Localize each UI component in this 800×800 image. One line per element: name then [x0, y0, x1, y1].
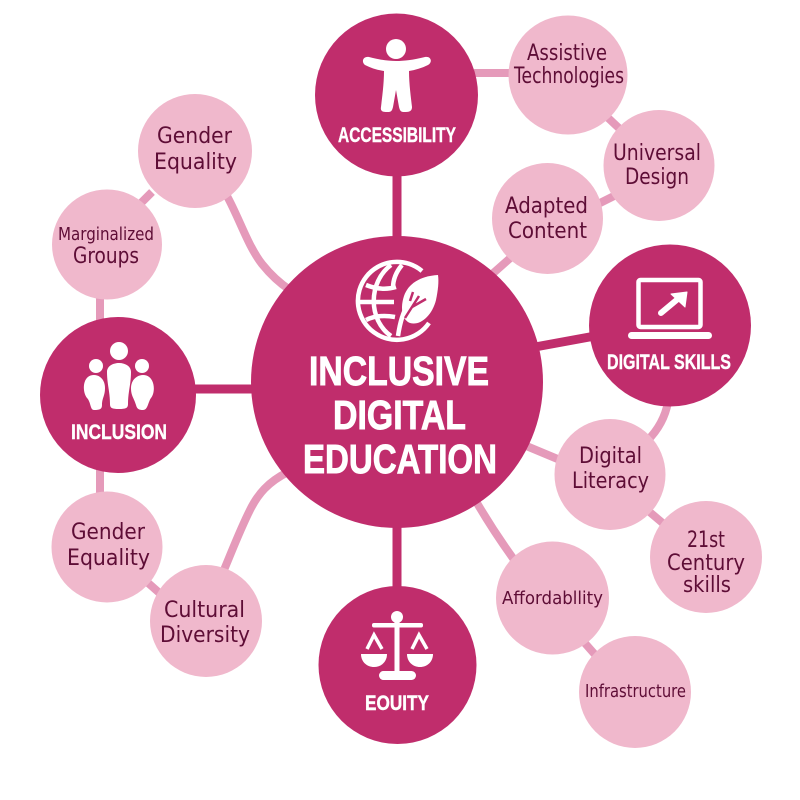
node: Digital Literacy: [554, 419, 666, 530]
node: Affordability: [496, 542, 609, 654]
node: Gender Equality (upper): [138, 94, 252, 208]
hub: Accessibility: [315, 14, 478, 176]
node: 21st Century skills: 21st: [687, 528, 725, 553]
node: Assistive Technologies: Technologies: [513, 64, 624, 89]
label: INCLUSION: [71, 421, 167, 444]
node: Universal Design: Design: [625, 165, 689, 190]
node: Assistive Technologies: [508, 16, 628, 134]
icon: globe with leaf: [358, 262, 438, 340]
node: Marginalized Groups: Groups: [73, 244, 139, 269]
hub: Inclusion: [40, 317, 196, 473]
label: ACCESSIBILITY: [338, 124, 456, 147]
node: 21st Century skills: [650, 501, 762, 613]
icon: laptop with arrow: [628, 280, 712, 339]
heading: EDUCATION: [303, 436, 497, 482]
icon: balance scale: [361, 611, 433, 680]
heading: INCLUSIVE: [309, 348, 489, 394]
node: Infrastructure: Infrastructure: [585, 681, 686, 702]
node: Marginalized Groups: [52, 190, 162, 300]
node: Digital Literacy: Digital: [579, 444, 642, 469]
label: DIGITAL SKILLS: [607, 351, 731, 374]
node: Affordability: Affordabllity: [502, 588, 603, 609]
icon: three people: [84, 342, 154, 410]
icon: person with open arms: [363, 39, 431, 112]
node: 21st Century skills: skills: [683, 573, 731, 598]
node: Digital Literacy: Literacy: [572, 469, 649, 494]
heading: [303, 348, 497, 482]
node: Cultural Diversity: [150, 565, 262, 677]
node: Universal Design: [604, 110, 714, 221]
node: Adapted Content: Adapted: [505, 194, 588, 219]
central hub: Inclusive Digital Education: [251, 236, 543, 528]
node: Infrastructure: [579, 636, 691, 748]
node: Assistive Technologies: Assistive: [527, 41, 607, 66]
node: Gender Equality (lower): Gender: [71, 520, 146, 545]
node: Marginalized Groups: Marginalized: [58, 224, 154, 245]
node: Cultural Diversity: Diversity: [160, 623, 250, 648]
node: Adapted Content: [492, 163, 603, 274]
node: Gender Equality (upper): Gender: [157, 124, 233, 149]
node: 21st Century skills: Century: [667, 551, 745, 576]
connectors: [100, 73, 668, 658]
hub: Equity: [318, 586, 476, 744]
node: Gender Equality (lower): Equality: [67, 546, 150, 571]
node: Gender Equality (upper): Equality: [154, 150, 237, 175]
node: Universal Design: Universal: [613, 141, 701, 166]
node: Cultural Diversity: Cultural: [164, 598, 245, 623]
label: EOUITY: [365, 692, 429, 715]
heading: DIGITAL: [333, 392, 466, 438]
node: Gender Equality (lower): [52, 492, 162, 602]
hub: Digital Skills: [589, 244, 751, 406]
node: Adapted Content: Content: [508, 219, 587, 244]
